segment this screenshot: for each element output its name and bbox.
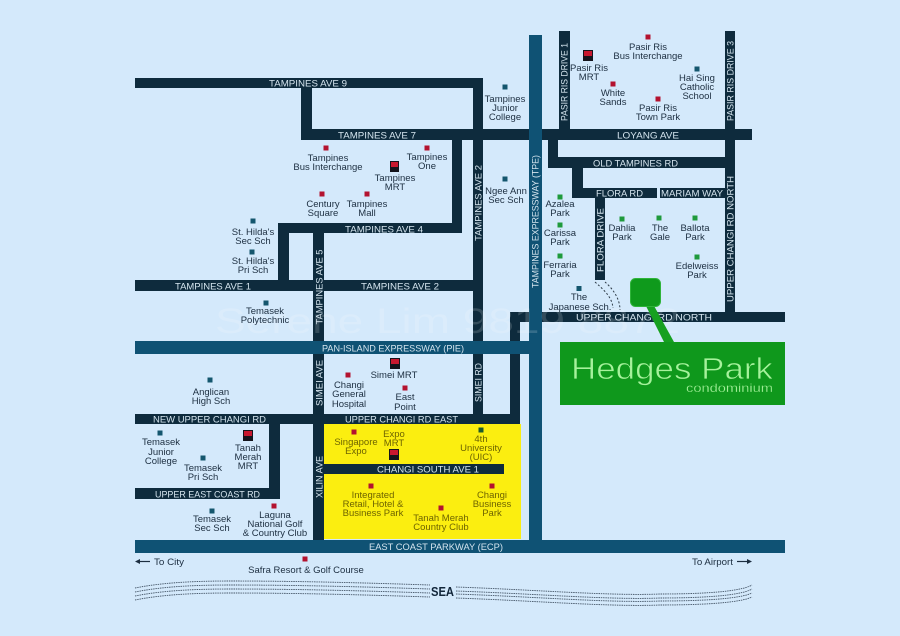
landmarks: Tampines: Tampines [347, 199, 388, 210]
road labels [153, 41, 736, 553]
road labels: MARIAM WAY [661, 188, 723, 198]
landmarks: Pasir Ris: Bus Interchange [613, 51, 683, 62]
landmarks: parks: Park [550, 208, 570, 219]
landmarks: parks [543, 194, 719, 313]
landmarks: Simei and west: General [332, 389, 366, 400]
landmarks: yellow zone: Park [482, 508, 502, 519]
landmarks: Tampines: St. Hilda's [232, 256, 274, 267]
road labels: UPPER EAST COAST RD [155, 490, 260, 500]
landmarks: Tampines: One [418, 161, 436, 172]
landmarks: yellow zone: Singapore [334, 437, 378, 448]
road labels: TAMPINES AVE 4 [345, 224, 423, 236]
landmarks: Simei and west: Temasek [142, 437, 180, 448]
landmarks: yellow zone: Changi [477, 490, 507, 501]
landmarks: Tampines: Ngee Ann [485, 186, 527, 197]
landmarks: parks: Dahlia [609, 223, 636, 234]
landmarks: parks: Park [685, 232, 705, 243]
road labels: EAST COAST PARKWAY (ECP) [369, 542, 503, 553]
landmarks: yellow zone: Integrated [352, 490, 394, 501]
landmarks: Pasir Ris: Sands [600, 97, 627, 108]
road labels: SIMEI RD [474, 363, 484, 402]
landmarks: yellow zone: University [460, 443, 502, 454]
direction: to airport [692, 557, 752, 568]
landmarks: Simei and west: Simei MRT [371, 370, 418, 381]
road labels: UPPER CHANGI RD NORTH [576, 312, 712, 324]
landmarks: Tampines: Pri Sch [238, 265, 268, 276]
road labels: XILIN AVE [314, 456, 326, 498]
road labels: FLORA RD [596, 188, 643, 200]
landmarks: Tampines: College [489, 112, 521, 123]
landmarks: Simei and west: Tanah [235, 443, 261, 454]
landmarks: parks: Azalea [545, 199, 575, 210]
landmarks: Tampines: Sec Sch [235, 236, 271, 247]
landmarks: parks: Ferraria [543, 260, 577, 271]
road labels: FLORA DRIVE [596, 208, 606, 272]
road labels: TAMPINES EXPRESSWAY (TPE) [530, 155, 542, 288]
watermark: Serene Lim 9819 8872 [215, 302, 680, 341]
landmarks: parks: Park [687, 270, 707, 281]
road labels: CHANGI SOUTH AVE 1 [377, 464, 479, 476]
pin: Hedges Park location [630, 278, 660, 306]
landmarks: Simei and west: East [395, 392, 415, 403]
landmarks: Pasir Ris: Pasir Ris [570, 63, 608, 74]
landmarks: Tampines: Tampines [308, 153, 349, 164]
landmarks: yellow zone: MRT [384, 438, 404, 449]
landmarks: parks: Japanese Sch. [549, 302, 611, 313]
landmarks: parks: The [571, 292, 587, 303]
landmarks: Pasir Ris: Hai Sing [679, 73, 715, 84]
landmarks: Tampines [232, 84, 527, 326]
yellow zone: Changi South [324, 424, 521, 539]
road labels: TAMPINES AVE 2 [474, 165, 484, 241]
landmarks: yellow zone: Expo [345, 446, 367, 457]
landmarks: parks: Edelweiss [676, 261, 719, 272]
landmarks: Simei and west: & Country Club [243, 528, 307, 539]
road labels: NEW UPPER CHANGI RD [153, 414, 266, 426]
landmarks: Tampines: Mall [358, 208, 376, 219]
landmarks: yellow zone: Business Park [343, 508, 404, 519]
road labels: PASIR RIS DRIVE 3 [726, 41, 736, 121]
landmarks: Tampines: Square [308, 208, 338, 219]
road labels: TAMPINES AVE 2 [361, 282, 439, 292]
road labels: TAMPINES AVE 1 [175, 282, 251, 292]
pin stem to Hedges Park [645, 304, 674, 342]
landmarks: Simei and west: Sec Sch [194, 523, 230, 534]
road labels: TAMPINES AVE 7 [338, 130, 416, 142]
landmarks: parks: Park [612, 232, 632, 243]
landmarks: Simei and west: MRT [238, 461, 258, 472]
landmarks: Pasir Ris: MRT [579, 72, 599, 83]
road labels: PAN-ISLAND EXPRESSWAY (PIE) [322, 344, 464, 354]
landmarks: Tampines: Junior [492, 103, 518, 114]
landmarks: Simei and west: High Sch [192, 396, 230, 407]
expressways [135, 35, 785, 553]
landmarks: Pasir Ris [570, 34, 715, 123]
landmarks: Tampines: Tampines [375, 173, 416, 184]
landmarks: yellow zone: Retail, Hotel & [343, 499, 404, 510]
direction: to airport: To Airport [692, 557, 733, 568]
landmarks: Simei and west: Safra Resort & Golf Course [248, 565, 364, 576]
landmarks: Pasir Ris: White [601, 88, 625, 99]
landmarks: yellow zone [334, 428, 512, 533]
direction: to city: To City [154, 557, 184, 568]
landmarks: Pasir Ris: Pasir Ris [629, 42, 667, 53]
landmarks: Simei and west: Pri Sch [188, 472, 218, 483]
landmarks: Pasir Ris: Town Park [636, 112, 680, 123]
landmarks: Simei and west: Point [394, 402, 416, 413]
panel: Hedges Park condominium: Hedges Park [571, 351, 774, 386]
landmarks: Simei and west: Anglican [193, 387, 229, 398]
landmarks: Simei and west: Changi [334, 380, 364, 391]
landmarks: Simei and west: National Golf [248, 519, 303, 530]
landmarks: yellow zone: Business [473, 499, 512, 510]
panel: Hedges Park condominium: condominium [686, 381, 773, 395]
landmarks: parks: Park [550, 237, 570, 248]
road labels: LOYANG AVE [617, 130, 679, 142]
landmarks: Tampines: Polytechnic [241, 315, 290, 326]
landmarks: yellow zone: 4th [474, 434, 488, 445]
landmarks: yellow zone: Country Club [413, 522, 469, 533]
landmarks: Tampines: Century [306, 199, 340, 210]
landmarks: Tampines: Temasek [246, 306, 284, 317]
landmarks: parks: Park [550, 269, 570, 280]
landmarks: Simei and west: Laguna [259, 510, 292, 521]
road labels: UPPER CHANGI RD EAST [345, 414, 458, 426]
landmarks: Tampines: St. Hilda's [232, 227, 274, 238]
landmarks: Pasir Ris: Pasir Ris [639, 103, 677, 114]
landmarks: Tampines: Bus Interchange [293, 162, 363, 173]
landmarks: Tampines: Tampines [485, 94, 526, 105]
direction: to city [135, 557, 184, 568]
landmarks: Simei and west [142, 358, 418, 576]
landmarks: Simei and west: Temasek [184, 463, 222, 474]
panel: Hedges Park condominium [560, 342, 785, 405]
landmarks: Tampines: Sec Sch [488, 195, 524, 206]
sea [135, 581, 752, 605]
landmarks: Simei and west: Merah [235, 452, 261, 463]
landmarks: Simei and west: College [145, 456, 177, 467]
road labels: PASIR RIS DRIVE 1 [560, 43, 570, 121]
landmarks: Pasir Ris: Catholic [680, 82, 714, 93]
road labels: TAMPINES AVE 9 [269, 78, 347, 90]
landmarks: parks: The [652, 223, 668, 234]
landmarks: yellow zone: (UIC) [470, 452, 492, 463]
landmarks: Tampines: MRT [385, 182, 405, 193]
landmarks: yellow zone: Tanah Merah [413, 513, 469, 524]
sea: SEA [431, 585, 454, 599]
landmarks: parks: Ballota [680, 223, 710, 234]
road labels: TAMPINES AVE 5 [314, 250, 326, 324]
landmarks: Simei and west: Junior [148, 447, 174, 458]
landmarks: Simei and west: Temasek [193, 514, 231, 525]
landmarks: Tampines: Tampines [407, 152, 448, 163]
landmarks: Simei and west: Hospital [332, 399, 366, 410]
road labels: SIMEI AVE [314, 360, 326, 406]
road labels: OLD TAMPINES RD [593, 158, 678, 170]
dashed track to Flora Drive [595, 282, 620, 310]
road labels: UPPER CHANGI RD NORTH [726, 176, 736, 302]
road network [135, 31, 785, 540]
landmarks: parks: Gale [650, 232, 670, 243]
landmarks: Pasir Ris: School [682, 91, 712, 102]
landmarks: parks: Carissa [544, 228, 577, 239]
landmarks: yellow zone: Expo [383, 429, 405, 440]
